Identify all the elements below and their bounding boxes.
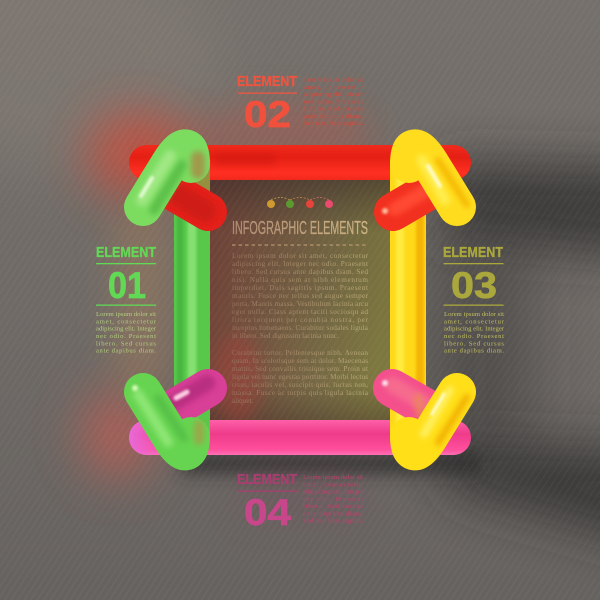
element 01 xyxy=(96,245,157,355)
text block: centre body: risus, iaculis vel, suscipit quis, luctus non, xyxy=(232,381,368,389)
hook: green bottom xyxy=(132,385,199,451)
text block: centre body: ligula vel nunc egestas porttitor. Morbi lectus xyxy=(232,373,368,381)
element 04: amet, consectetur xyxy=(303,481,364,488)
text block: centre body: Curabitur tortor. Pellentesque nibh. Aenean xyxy=(232,349,368,357)
text block: centre body: litora torquent per conubia nostra, per xyxy=(232,316,369,324)
element 03: libero. Sed cursus xyxy=(444,340,504,347)
text block: centre body: mauris. Fusce nec tellus sed augue semper xyxy=(232,292,369,300)
text block: centre body: aliquet. xyxy=(232,397,254,405)
hook: yellow bottom xyxy=(409,390,467,451)
text block: centre body xyxy=(232,252,369,405)
element 01: amet, consectetur xyxy=(96,318,157,325)
element 04: adipiscing elit. Integer xyxy=(303,488,364,496)
element 01: libero. Sed cursus xyxy=(96,340,156,347)
title dashed rule xyxy=(232,244,368,246)
title: INFOGRAPHIC ELEMENTS xyxy=(232,218,368,238)
cast shadow xyxy=(180,160,600,550)
element 04 xyxy=(237,472,364,533)
element 04: ELEMENT xyxy=(237,472,297,488)
element 04: ante dapibus diam. xyxy=(303,510,363,517)
element 04: Sed nisi. Duis sagittis. xyxy=(303,518,363,524)
text block: centre body: Lorem ipsum dolor sit amet, consectetur xyxy=(232,252,369,260)
capsule: pink bottom-left xyxy=(168,383,208,412)
element 03: amet, consectetur xyxy=(444,318,505,325)
frame: yellow tube xyxy=(400,160,420,440)
element 01: ELEMENT xyxy=(96,245,156,261)
element 02: libero. Sed cursus xyxy=(304,106,363,112)
element 02: Sed nisi. Duis sagittis. xyxy=(304,120,363,127)
decoration: four dots with dashed arcs xyxy=(267,198,333,208)
text block: centre body: quam. In scelerisque sem at dolor. Maecenas xyxy=(232,357,368,365)
element 02: adipiscing elit. Integer xyxy=(304,91,364,98)
capsule: pink bottom-right xyxy=(382,380,434,414)
element 02 xyxy=(237,74,364,135)
text block: centre body: mattis. Sed convallis tristique sem. Proin ut xyxy=(232,365,368,373)
frame: red top bar xyxy=(129,145,471,180)
element 03: nec odio. Praesent xyxy=(444,333,504,340)
element 02: amet, consectetur xyxy=(304,84,364,91)
element 01: 01 xyxy=(108,265,146,306)
element 04: libero. Sed cursus xyxy=(303,503,363,510)
text block: centre body: adipiscing elit. Integer nec odio. Praesent xyxy=(232,260,368,268)
text block: centre body: porta. Mauris massa. Vestibulum lacinia arcu xyxy=(232,300,368,308)
element 04: nec odio. Praesent xyxy=(303,496,363,503)
element 02: nec odio. Praesent xyxy=(304,98,363,105)
text block: centre body: nisi. Nulla quis sem at nibh elementum xyxy=(232,276,368,284)
element 02: ELEMENT xyxy=(237,74,297,90)
capsule: red top-right xyxy=(382,186,434,214)
text block: centre body: massa. Fusce ac turpis quis ligula lacinia xyxy=(232,389,369,397)
element 04: Lorem ipsum dolor sit xyxy=(303,474,363,481)
colour glows xyxy=(82,100,370,520)
text block: centre body: libero. Sed cursus ante dapibus diam. Sed xyxy=(232,268,368,276)
element 03: ante dapibus diam. xyxy=(444,348,504,355)
text block: centre body: imperdiet. Duis sagittis ipsum. Praesent xyxy=(232,284,368,292)
element 03 xyxy=(443,245,505,355)
element 01: Lorem ipsum dolor sit xyxy=(96,311,156,318)
capsule: red top-left xyxy=(165,187,208,212)
text block: centre body: inceptos himenaeos. Curabitur sodales ligula xyxy=(232,324,369,332)
element 03: 03 xyxy=(451,265,497,306)
element 03: Lorem ipsum dolor sit xyxy=(444,311,504,318)
element 02: ante dapibus diam. xyxy=(304,113,363,120)
panel: centre backing xyxy=(210,180,390,423)
hook: yellow top xyxy=(409,148,467,207)
element 01: adipiscing elit. Integer xyxy=(96,326,157,333)
frame: green tube xyxy=(180,160,192,440)
frame: pink bottom bar xyxy=(129,420,471,455)
element 04: 04 xyxy=(244,492,291,533)
hook: green top xyxy=(141,148,198,210)
text block: centre body: eget nulla. Class aptent taciti sociosqu ad xyxy=(232,308,368,316)
element 03: adipiscing elit. Integer xyxy=(444,326,505,333)
element 03: ELEMENT xyxy=(443,245,503,261)
element 02: 02 xyxy=(244,94,291,135)
element 02: Lorem ipsum dolor sit xyxy=(304,76,363,84)
element 01: ante dapibus diam. xyxy=(96,348,156,355)
text block: centre body: in libero. Sed dignissim lacinia nunc. xyxy=(232,332,339,340)
element 01: nec odio. Praesent xyxy=(96,333,156,340)
